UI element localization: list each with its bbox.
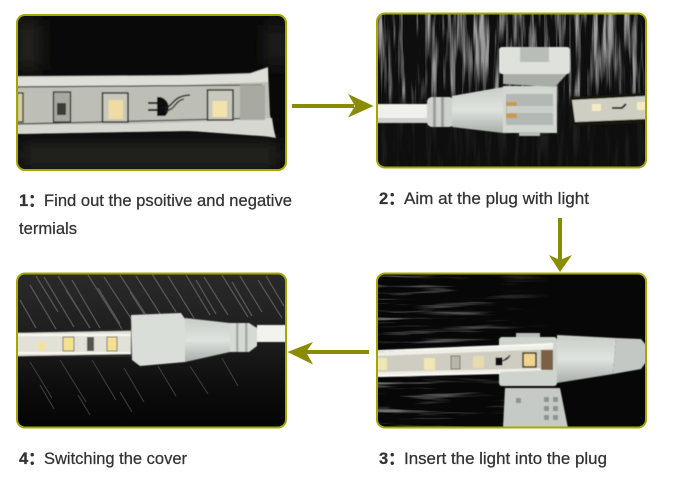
text: step 4 caption: Switching the cover xyxy=(44,450,187,468)
photo: strip inserted in plug xyxy=(377,333,646,428)
text: step 3 caption: 3： xyxy=(379,450,405,468)
text: step 1 caption xyxy=(19,192,292,238)
text: step 4 caption: 4： xyxy=(19,450,45,468)
text: step 3 caption: Insert the light into the plug xyxy=(404,450,607,468)
icon: plug symbol xyxy=(148,95,190,116)
text: step 2 caption: Aim at the plug with light xyxy=(404,190,589,208)
text: step 1 caption: termials xyxy=(19,220,77,238)
panel: step 3 photo xyxy=(377,273,647,428)
arrow: step 1 to step 2 xyxy=(292,94,374,118)
text: step 1 caption: 1： xyxy=(19,192,45,210)
arrow: step 3 to step 4 xyxy=(288,342,369,364)
panel: step 1 photo xyxy=(17,15,287,171)
photo: cable and open plug xyxy=(377,47,646,136)
arrow: step 2 to step 3 xyxy=(549,218,572,272)
text: step 1 caption: Find out the psoitive and negative xyxy=(44,192,292,210)
panel: step 4 photo xyxy=(17,273,287,428)
photo: closed plug on strip xyxy=(17,313,287,366)
photo: LED strip end xyxy=(17,67,276,138)
text: step 2 caption: 2： xyxy=(379,190,405,208)
panel: step 2 photo xyxy=(377,13,647,168)
